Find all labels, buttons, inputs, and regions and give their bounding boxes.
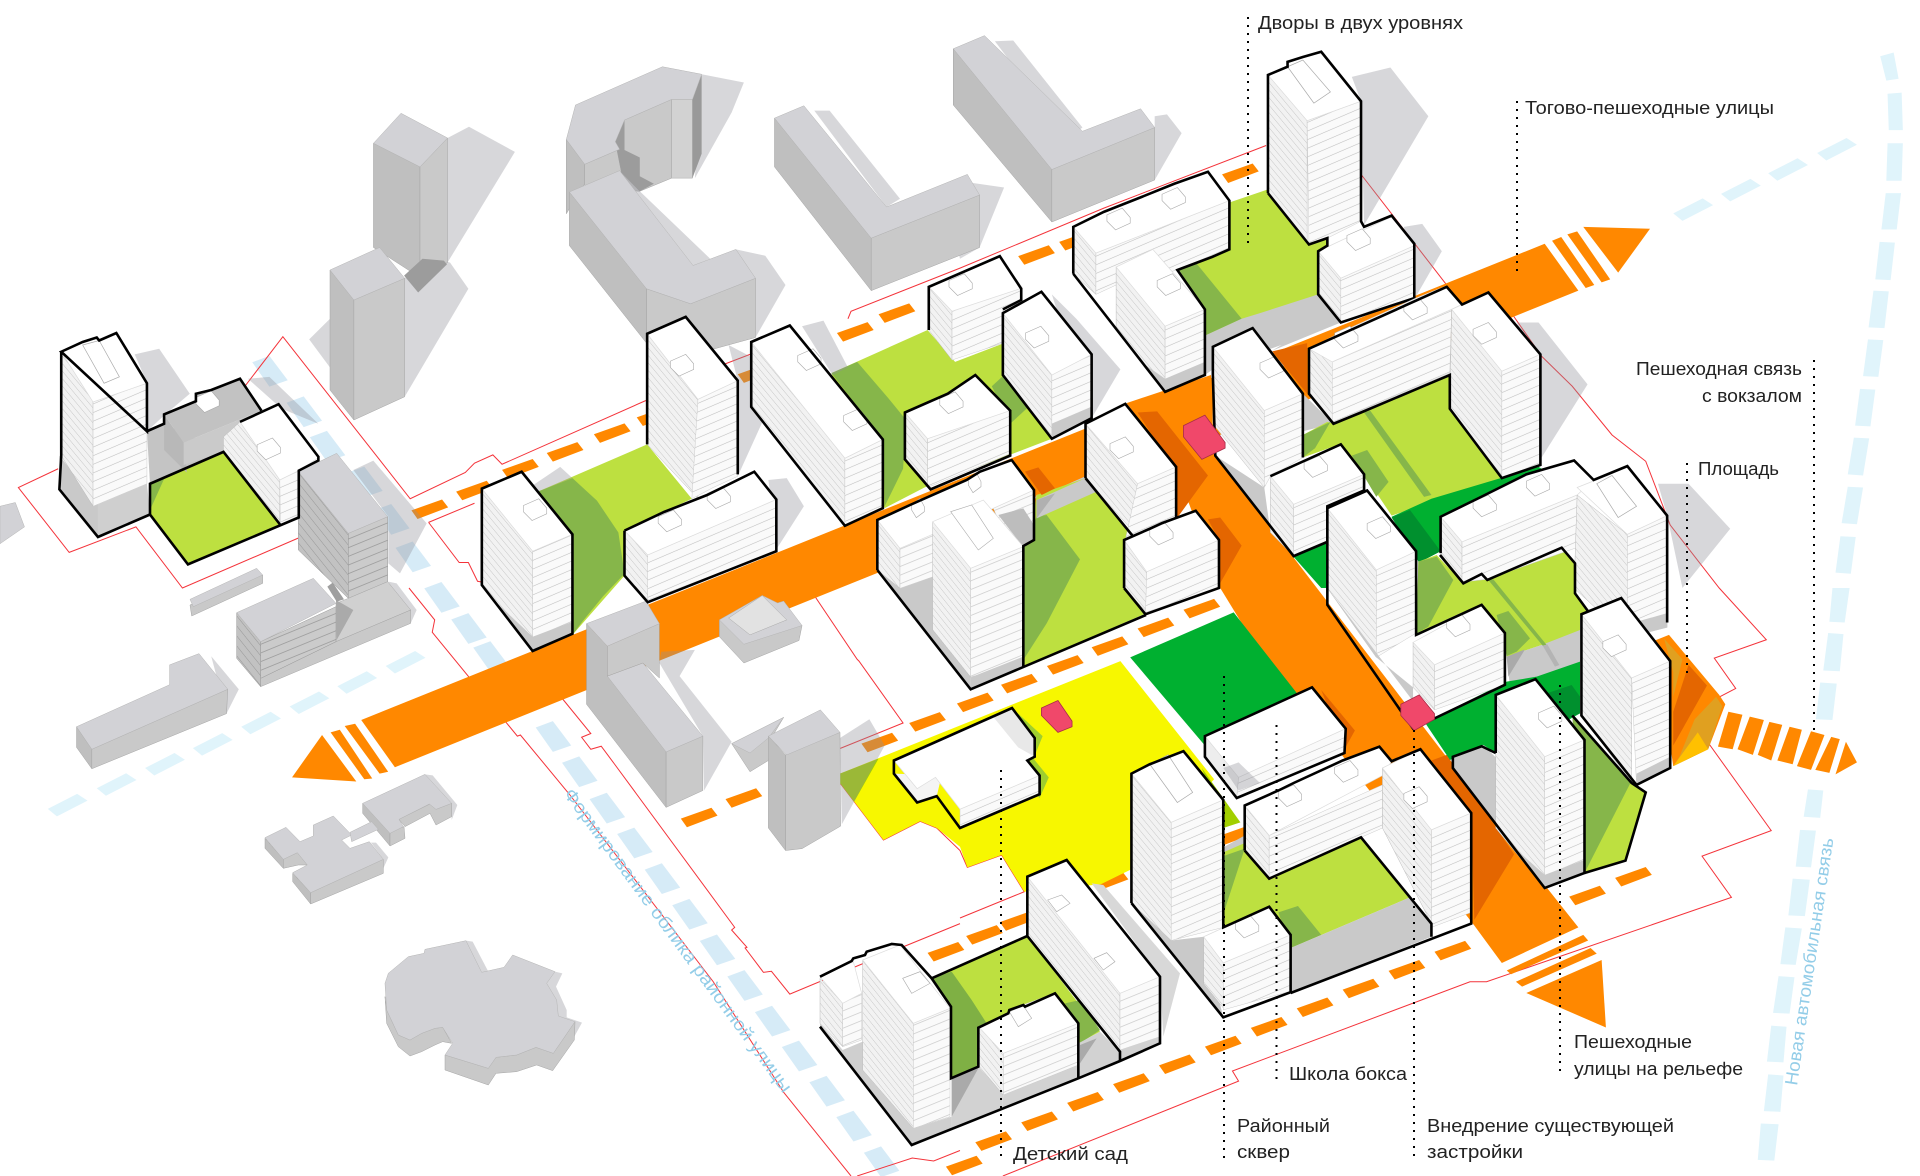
tower O and block P	[1213, 328, 1364, 556]
blue dashed line: transit link west	[48, 138, 1857, 816]
pink pavilion north	[1183, 415, 1225, 459]
label: district: Районный	[1237, 1116, 1330, 1136]
tower AA and block BB	[1131, 751, 1291, 1017]
label: new road rotated: Новая автомобильная связь	[1781, 836, 1837, 1087]
long L block	[77, 654, 239, 769]
district square: yellow plaza	[840, 661, 1240, 892]
blue dashed line: district street	[252, 356, 899, 1176]
label: pedestrian link: Пешеходная связь	[1636, 359, 1802, 379]
grey old building with outline	[147, 379, 261, 472]
tower S and block T	[1327, 490, 1505, 729]
tower GG	[1086, 404, 1176, 540]
courtyard 3	[831, 330, 1052, 508]
label: pedestrian: Пешеходные	[1574, 1032, 1692, 1052]
courtyard south	[932, 936, 1120, 1128]
round building	[385, 941, 582, 1085]
arrow west	[292, 724, 388, 782]
courtyard 2	[530, 444, 692, 635]
tower I	[1003, 292, 1092, 439]
long block F	[751, 326, 883, 526]
courtyard centre two level	[1303, 375, 1502, 516]
small block in yard	[979, 993, 1078, 1110]
tower E	[647, 317, 738, 499]
block J-K top cluster	[1073, 172, 1229, 392]
label: boxing school: Школа бокса	[1289, 1064, 1408, 1084]
label: to station: с вокзалом	[1702, 386, 1802, 406]
tower M and block N: two level yard	[1268, 52, 1414, 322]
U block east with tower V	[1441, 460, 1667, 638]
tall tower	[863, 945, 950, 1128]
southern cluster: towers and blocks	[820, 860, 1160, 1145]
boxing school	[1205, 687, 1346, 798]
black outlines of southern cluster	[820, 860, 1160, 1145]
tower C	[482, 472, 572, 651]
courtyards: lime plates and grey pavement	[147, 189, 1646, 1128]
label: two level yards: Дворы в двух уровнях	[1258, 13, 1463, 33]
hospital	[265, 774, 457, 904]
courtyard centre 2	[1024, 476, 1144, 661]
block G	[905, 375, 1010, 489]
block FF with tower at centre	[877, 460, 1146, 689]
dotted leader lines	[1001, 17, 1814, 1162]
label: district street rotated: Формирование облика районной улицы	[560, 785, 796, 1096]
U block Z with tower	[1245, 747, 1471, 993]
long narrow block	[190, 568, 263, 616]
tower near plaza	[732, 710, 885, 850]
new white buildings	[59, 52, 1670, 1145]
labels	[560, 13, 1837, 1164]
pink transit entrances	[1041, 415, 1434, 732]
building west tower	[59, 333, 150, 537]
arrow east	[1552, 227, 1650, 288]
small far block	[0, 502, 24, 544]
courtyard central with tower shadow	[1023, 467, 1146, 667]
red site boundary	[18, 146, 1771, 1176]
building west block	[150, 404, 320, 564]
U block Q with tower R	[1309, 286, 1540, 478]
courtyard west	[147, 424, 280, 564]
cross pedestrian street with arrow	[1127, 343, 1606, 1028]
label: garden: сквер	[1237, 1142, 1290, 1162]
orange dashed service roads	[411, 164, 1652, 1175]
block D	[624, 472, 776, 602]
district public garden	[1130, 612, 1297, 753]
label: retail pedestrian streets: Тогово-пешеходные улицы	[1525, 98, 1774, 118]
block H	[929, 256, 1022, 360]
pavilion	[719, 596, 802, 663]
east pedestrian street on relief	[1655, 635, 1857, 774]
label: streets on relief: улицы на рельефе	[1574, 1059, 1743, 1079]
label: integration: Внедрение существующей	[1427, 1116, 1674, 1136]
courtyard far east	[1417, 548, 1588, 800]
tower W	[1581, 598, 1670, 785]
context buildings: back row	[309, 36, 1182, 420]
main pedestrian street	[292, 244, 1578, 782]
base plinth	[820, 1023, 952, 1145]
courtyard dark green east	[1294, 467, 1548, 588]
long east block	[1027, 860, 1160, 1061]
blue dashed line: new road	[1758, 52, 1903, 1161]
context buildings: front	[0, 453, 885, 1085]
label: kindergarten: Детский сад	[1013, 1144, 1129, 1164]
low block	[820, 962, 862, 1047]
tall block on main street	[587, 601, 732, 807]
pink pavilion east	[1401, 695, 1434, 730]
courtyard south centre	[1223, 836, 1431, 993]
grey block with tower west	[237, 453, 427, 687]
shadows of new buildings	[135, 68, 1730, 1037]
kindergarten	[894, 708, 1049, 828]
arrow south	[1507, 935, 1606, 1028]
tower X	[1453, 679, 1646, 888]
label: of buildings: застройки	[1427, 1142, 1523, 1162]
courtyard far east lower lawn	[1572, 716, 1646, 873]
block HH	[1124, 511, 1219, 614]
label: square: Площадь	[1698, 459, 1779, 479]
U block east courtyard edge	[1440, 548, 1588, 612]
courtyard upper two level	[1165, 189, 1341, 375]
pink pavilion plaza	[1041, 700, 1072, 732]
